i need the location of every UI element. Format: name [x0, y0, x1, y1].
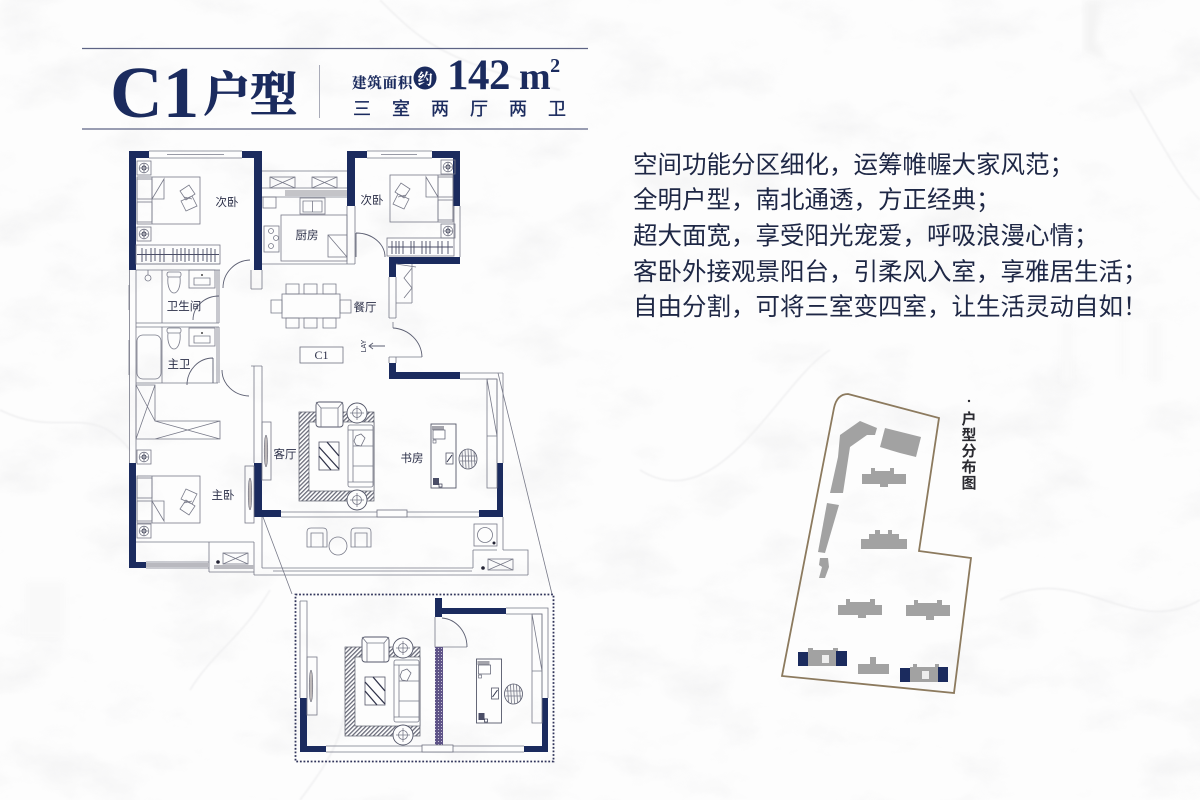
approx badge [414, 66, 436, 90]
entry: unit tag and arrow: C1 [314, 348, 329, 362]
vertical label: distribution map: 分 [961, 443, 977, 460]
vertical label: distribution map: 型 [961, 427, 977, 444]
study [400, 379, 497, 488]
description text [633, 151, 1148, 321]
description text: 自由分割，可将三室变四室，让生活灵动自如！ [633, 293, 1148, 321]
buildings [808, 421, 950, 682]
vertical label: distribution map [961, 400, 977, 492]
vertical label: distribution map: 图 [961, 475, 977, 492]
building area label: 建筑面积 [352, 74, 414, 92]
description text: 客卧外接观景阳台，引柔风入室，享雅居生活； [633, 258, 1148, 286]
vertical label: distribution map: 户 [961, 410, 977, 428]
kitchen [263, 177, 347, 261]
room summary: 三室两厅两卫 [353, 99, 566, 119]
bedroom top right: 次卧 [360, 193, 384, 207]
description text: 全明户型，南北通透，方正经典； [633, 186, 1000, 214]
bedroom top right [356, 160, 455, 257]
bathrooms: 主卫 [168, 358, 190, 371]
leader lines to enlarged view [263, 373, 552, 594]
balcony [307, 510, 513, 570]
heading: C1 户型: C1 [110, 52, 199, 133]
navy walls of inset [300, 598, 548, 752]
kitchen: 厨房 [296, 229, 318, 242]
master bedroom [137, 450, 254, 569]
description text: 空间功能分区细化，运筹帷幄大家风范； [633, 151, 1074, 179]
area value: 2 [550, 55, 560, 77]
bathrooms [129, 260, 250, 396]
approx badge: 约 [417, 70, 433, 88]
heading: C1 户型: 户型 [203, 70, 297, 122]
entry: unit tag and arrow: LAY [361, 339, 368, 352]
study: 书房 [400, 452, 424, 465]
site plan [782, 394, 971, 693]
entry: unit tag and arrow [300, 264, 422, 363]
enlarged living/study alternative [296, 594, 554, 762]
bathrooms: 卫生间 [167, 299, 201, 313]
area value: 142m [447, 52, 550, 99]
description text: 超大面宽，享受阳光宠爱，呼吸浪漫心情； [633, 222, 1098, 250]
bedroom top left [136, 161, 239, 264]
living room [262, 402, 374, 510]
dining table: 餐厅 [354, 300, 376, 314]
new partition wall [435, 647, 443, 746]
master bedroom: 主卧 [212, 489, 235, 502]
floor plan [129, 151, 552, 594]
living room: 客厅 [274, 447, 296, 461]
walls outline [130, 151, 528, 575]
vertical label: distribution map: 布 [961, 458, 977, 476]
bedroom top left: 次卧 [216, 195, 239, 209]
navy walls [129, 151, 503, 568]
shaft [136, 385, 220, 439]
dining table [271, 284, 376, 328]
title block [82, 48, 588, 133]
